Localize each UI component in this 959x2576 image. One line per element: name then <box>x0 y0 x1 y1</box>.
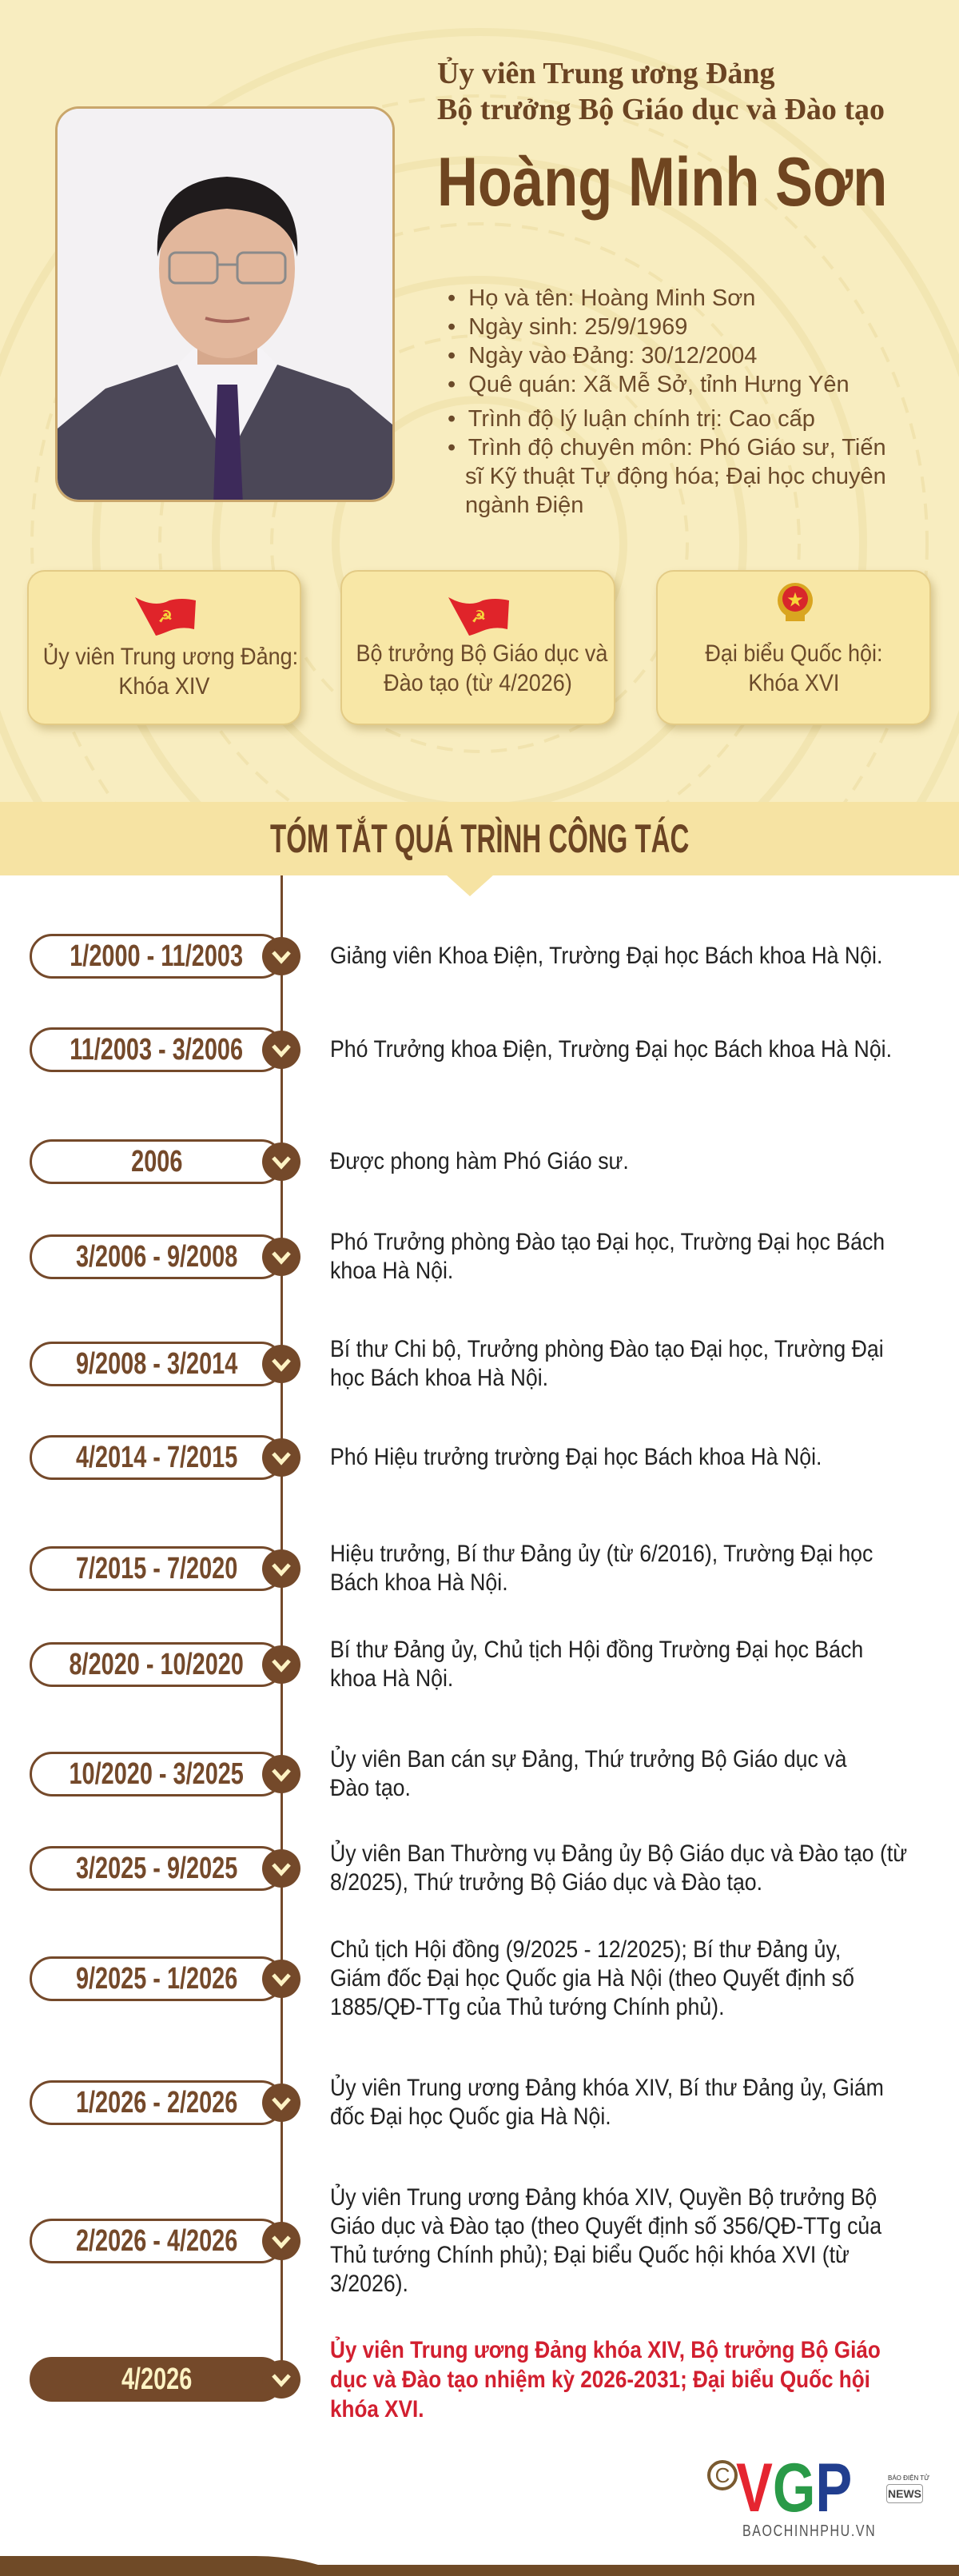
logo: VGP: BÁO ĐIỆN TỬ <box>888 2474 929 2482</box>
text: khóa XVI. <box>330 2395 424 2422</box>
bullet info list <box>448 285 886 518</box>
text: Ủy viên Trung ương Đảng khóa XIV, Bộ trưởng Bộ Giáo <box>330 2336 881 2363</box>
timeline item 10 <box>30 1840 907 1896</box>
card: national assembly <box>656 570 931 725</box>
timeline item 12: Ủy viên Trung ương Đảng khóa XIV, Bí thư Đảng ủy, Giám <box>330 2075 884 2101</box>
bullet info list: • Trình độ chuyên môn: Phó Giáo sư, Tiến <box>448 435 886 461</box>
timeline item 2: 11/2003 - 3/2006 <box>70 1033 243 1067</box>
timeline item 1: 1/2000 - 11/2003 <box>70 939 243 973</box>
footer bar <box>0 2556 959 2576</box>
timeline item 6 <box>30 1435 822 1480</box>
icon: party flag <box>448 597 509 636</box>
logo: VGP: VGP <box>736 2450 852 2526</box>
timeline item 7: Hiệu trưởng, Bí thư Đảng ủy (từ 6/2016), Trường Đại học <box>330 1541 873 1567</box>
timeline item 14 final: dục và Đào tạo nhiệm kỳ 2026-2031; Đại biểu Quốc hội <box>330 2367 870 2392</box>
text: 1885/QĐ-TTg của Thủ tướng Chính phủ). <box>330 1994 725 2020</box>
timeline item 13: Thủ tướng Chính phủ); Đại biểu Quốc hội khóa XVI (từ <box>330 2242 850 2268</box>
logo: VGP: NEWS <box>888 2487 921 2500</box>
timeline item 9: 10/2020 - 3/2025 <box>70 1757 244 1791</box>
bullet info list: • Ngày sinh: 25/9/1969 <box>448 314 687 340</box>
timeline item 10: Ủy viên Ban Thường vụ Đảng ủy Bộ Giáo dục và Đào tạo (từ <box>330 1840 907 1867</box>
card: minister: Bộ trưởng Bộ Giáo dục và <box>356 640 607 667</box>
timeline item 13: 2/2026 - 4/2026 <box>76 2224 237 2258</box>
section band heading: TÓM TẮT QUÁ TRÌNH CÔNG TÁC <box>270 816 689 861</box>
timeline item 1 <box>30 934 882 979</box>
timeline item 6: 4/2014 - 7/2015 <box>76 1441 237 1474</box>
card: minister <box>340 570 615 725</box>
text: Chủ tịch Hội đồng (9/2025 - 12/2025); Bí thư Đảng ủy, <box>330 1936 841 1963</box>
logo: VGP: C <box>715 2463 730 2487</box>
timeline item 3 <box>30 1139 629 1184</box>
timeline item 14 final <box>30 2336 881 2422</box>
timeline item 10: 3/2025 - 9/2025 <box>76 1852 237 1885</box>
timeline item 8: 8/2020 - 10/2020 <box>70 1648 244 1681</box>
card: party central committee <box>27 570 301 725</box>
icon: party flag: ☭ <box>158 608 173 626</box>
title: position lines <box>437 57 885 126</box>
icon: party flag <box>135 597 196 636</box>
timeline vertical line <box>281 875 283 2361</box>
timeline item 13: Giáo dục và Đào tạo (theo Quyết định số 356/QĐ-TTg của <box>330 2213 881 2239</box>
timeline item 14 final: 4/2026 <box>121 2363 192 2396</box>
timeline item 3: 2006 <box>131 1145 182 1178</box>
header background <box>0 0 959 802</box>
timeline item 5: học Bách khoa Hà Nội. <box>330 1365 548 1391</box>
title: position lines: Bộ trưởng Bộ Giáo dục và Đào tạo <box>437 93 885 126</box>
timeline item 4: Phó Trưởng phòng Đào tạo Đại học, Trường Đại học Bách <box>330 1229 885 1255</box>
icon: national emblem: ★ <box>787 592 803 609</box>
timeline item 7: Bách khoa Hà Nội. <box>330 1569 508 1596</box>
card: national assembly: Đại biểu Quốc hội: <box>705 640 882 667</box>
timeline item 1: Giảng viên Khoa Điện, Trường Đại học Bách khoa Hà Nội. <box>330 943 882 969</box>
timeline item 12: đốc Đại học Quốc gia Hà Nội. <box>330 2103 611 2130</box>
timeline item 11: 9/2025 - 1/2026 <box>76 1962 237 1996</box>
timeline item 9 <box>30 1746 847 1801</box>
timeline item 11 <box>30 1936 854 2020</box>
bullet info list: • Họ và tên: Hoàng Minh Sơn <box>448 285 755 311</box>
photo portrait <box>55 106 395 502</box>
timeline item 2: Phó Trưởng khoa Điện, Trường Đại học Bách khoa Hà Nội. <box>330 1036 892 1063</box>
bullet info list: • Quê quán: Xã Mễ Sở, tỉnh Hưng Yên <box>448 372 850 397</box>
bullet info list: • Trình độ lý luận chính trị: Cao cấp <box>448 406 815 432</box>
section band heading <box>0 802 959 896</box>
timeline item 12 <box>30 2074 884 2130</box>
timeline item 12: 1/2026 - 2/2026 <box>76 2086 237 2119</box>
text: Ủy viên Trung ương Đảng khóa XIV, Quyền Bộ trưởng Bộ <box>330 2184 877 2211</box>
timeline item 10: 8/2025), Thứ trưởng Bộ Giáo dục và Đào tạo. <box>330 1869 762 1896</box>
timeline item 11: Giám đốc Đại học Quốc gia Hà Nội (theo Quyết định số <box>330 1965 854 1992</box>
bullet info list: sĩ Kỹ thuật Tự động hóa; Đại học chuyên <box>465 464 886 489</box>
timeline item 8: Bí thư Đảng ủy, Chủ tịch Hội đồng Trường Đại học Bách <box>330 1637 863 1663</box>
icon: national emblem <box>778 583 813 621</box>
timeline item 5: 9/2008 - 3/2014 <box>76 1347 237 1381</box>
timeline item 8: khoa Hà Nội. <box>330 1665 453 1692</box>
logo: VGP <box>707 2450 929 2540</box>
bullet info list: • Ngày vào Đảng: 30/12/2004 <box>448 343 757 369</box>
title: position lines: Ủy viên Trung ương Đảng <box>437 57 775 90</box>
card: minister: Đào tạo (từ 4/2026) <box>384 670 572 696</box>
timeline item 3: Được phong hàm Phó Giáo sư. <box>330 1148 629 1174</box>
card: party central committee: Khóa XIV <box>118 673 210 700</box>
timeline item 4: khoa Hà Nội. <box>330 1258 453 1284</box>
timeline item 13 <box>30 2184 882 2297</box>
timeline item 5: Bí thư Chi bộ, Trưởng phòng Đào tạo Đại học, Trường Đại <box>330 1336 884 1362</box>
timeline item 7: 7/2015 - 7/2020 <box>76 1552 237 1585</box>
title: name: Hoàng Minh Sơn <box>437 144 887 221</box>
timeline item 9: Ủy viên Ban cán sự Đảng, Thứ trưởng Bộ Giáo dục và <box>330 1746 846 1772</box>
logo: VGP: BAOCHINHPHU.VN <box>742 2522 876 2540</box>
card: national assembly: Khóa XVI <box>748 670 839 696</box>
timeline item 8 <box>30 1637 863 1692</box>
timeline item 5 <box>30 1336 884 1391</box>
timeline item 4: 3/2006 - 9/2008 <box>76 1240 237 1274</box>
bullet info list: ngành Điện <box>465 492 583 518</box>
icon: party flag: ☭ <box>472 608 486 626</box>
timeline item 7 <box>30 1541 873 1596</box>
card: party central committee: Ủy viên Trung ương Đảng: <box>43 644 298 670</box>
timeline item 6: Phó Hiệu trưởng trường Đại học Bách khoa Hà Nội. <box>330 1444 822 1470</box>
text: 3/2026). <box>330 2271 408 2297</box>
timeline item 2 <box>30 1027 892 1072</box>
timeline item 9: Đào tạo. <box>330 1775 411 1801</box>
timeline item 4 <box>30 1229 885 1284</box>
